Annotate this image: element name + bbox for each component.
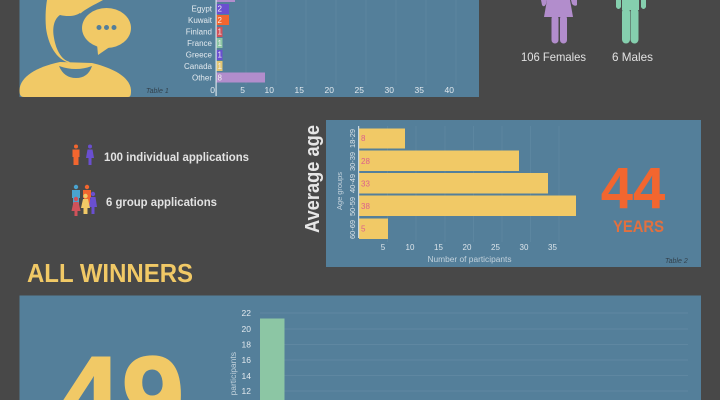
bar chart: age groups: 28: [361, 157, 370, 166]
bar chart: countries: 1: [218, 62, 222, 71]
bar chart: age groups: 35: [548, 243, 557, 252]
bar chart: age groups: 18-29: [348, 129, 357, 148]
panel: applicants by country (Table 1): [20, 0, 479, 97]
bar chart: age groups: Number of participants: [428, 255, 512, 264]
bar chart: countries: 20: [325, 85, 334, 95]
bar chart: age groups: 25: [491, 243, 500, 252]
stat: 44 years: YEARS: [613, 217, 664, 236]
bar chart: countries: France: [187, 39, 213, 48]
bar chart: age groups: 60-69: [348, 220, 357, 239]
caption: Table 2: Table 2: [665, 258, 688, 265]
bar chart: winners: 22: [242, 308, 251, 318]
bar chart: countries: [184, 0, 454, 96]
bar chart: countries: Canada: [184, 62, 213, 71]
caption: Table 1: Table 1: [146, 88, 169, 95]
bar chart: age groups: 38: [361, 202, 370, 211]
bar chart: age groups: 5: [381, 243, 386, 252]
icon: group applicants: [72, 185, 97, 216]
bar chart: winners: [228, 308, 688, 400]
bar chart: countries: 1: [218, 39, 222, 48]
bar chart: age groups: Age groups: [335, 172, 344, 210]
panel: all winners: [20, 296, 701, 400]
stat: 44 years: 44: [601, 156, 665, 221]
bar chart: countries: 2: [218, 4, 222, 14]
bar chart: age groups: 10: [406, 243, 415, 252]
bar chart: countries: 30: [385, 85, 394, 95]
icon: person with speech bubble: [20, 0, 131, 97]
bar chart: age groups: 15: [434, 243, 443, 252]
bar chart: countries: 2: [218, 16, 222, 25]
bar chart: winners: 16: [242, 355, 251, 365]
bar chart: countries: 5: [240, 85, 245, 95]
bar chart: countries: 1: [218, 28, 222, 36]
bar chart: winners: 12: [242, 386, 251, 396]
bar chart: winners: 20: [242, 324, 251, 334]
bar chart: winners: 18: [242, 340, 251, 350]
bar chart: countries: 10: [265, 85, 274, 95]
text: group applications: 6 group applications: [106, 195, 217, 209]
bar chart: countries: 40: [445, 85, 454, 95]
bar chart: countries: 15: [295, 85, 304, 95]
bar chart: countries: Finland: [186, 28, 212, 36]
bar chart: countries: Other: [192, 74, 212, 82]
icon: individual applicants: [72, 144, 94, 165]
bar chart: age groups: 5: [361, 224, 366, 234]
icon: male figure: [616, 0, 646, 44]
bar chart: countries: Kuwait: [188, 16, 213, 25]
bar chart: age groups: 8: [361, 134, 366, 143]
bar chart: countries: 8: [218, 74, 222, 82]
text: individual applications: 100 individual applications: [104, 150, 249, 164]
bar chart: age groups: 50-59: [348, 197, 357, 216]
icon: female figure: [541, 0, 577, 44]
panel: average age (Table 2): [326, 120, 701, 267]
bar chart: age groups: 30-39: [348, 152, 357, 171]
bar chart: countries: 25: [355, 85, 364, 95]
bar chart: age groups: [335, 126, 576, 264]
bar chart: countries: 1: [218, 50, 222, 60]
bar chart: winners: participants: [228, 352, 238, 395]
bar chart: age groups: 30: [520, 243, 529, 252]
bar chart: countries: Greece: [186, 50, 213, 60]
bar chart: winners: 14: [242, 371, 251, 381]
bar chart: countries: 0: [210, 85, 215, 95]
heading: Average age: Average age: [302, 125, 324, 233]
bar chart: age groups: 20: [463, 243, 472, 252]
bar chart: countries: 35: [415, 85, 424, 95]
heading: All winners: ALL WINNERS: [27, 258, 193, 288]
label: 106 females: 106 Females: [521, 50, 586, 64]
label: 6 males: 6 Males: [612, 50, 653, 64]
bar chart: countries: Egypt: [192, 4, 213, 14]
bar chart: age groups: 40-49: [348, 174, 357, 193]
bar chart: age groups: 33: [361, 180, 370, 188]
